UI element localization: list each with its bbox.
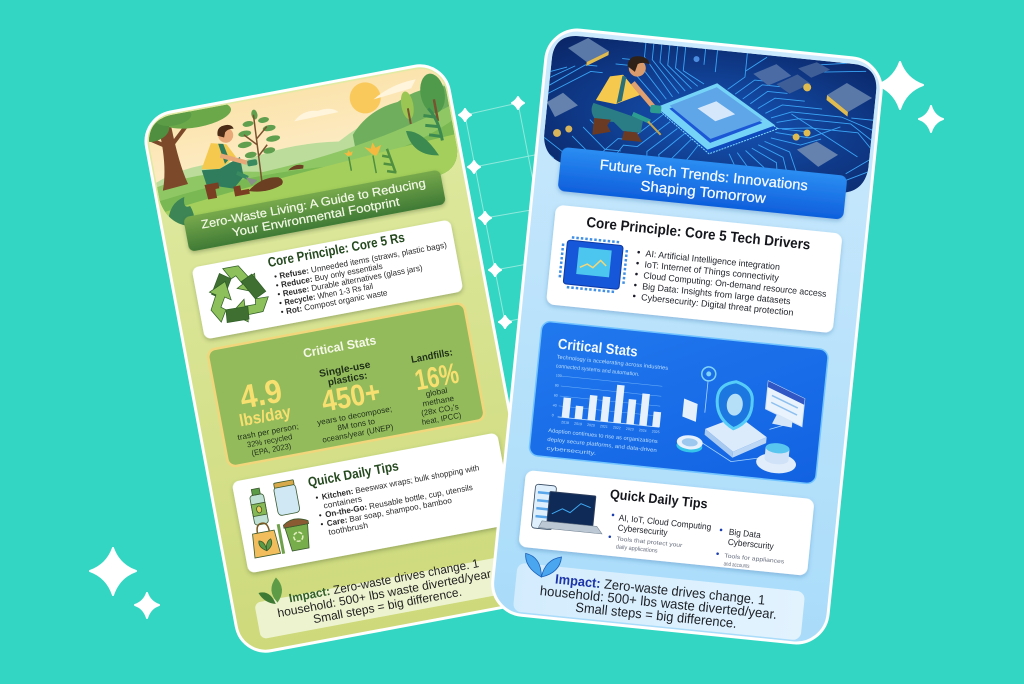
text: impact statement: Small steps = big difference.: [312, 585, 463, 626]
list: tips: Kitchen: Beeswax wraps; bulk shopping with: [321, 463, 480, 502]
text: core principle heading: Core Principle: Core 5 Rs: [266, 230, 406, 270]
panel: critical stats: [207, 302, 485, 467]
stat: 450+ single-use plastics: 450+: [319, 375, 383, 419]
list: five Rs: Reuse: Durable alternatives (glass jars): [282, 262, 424, 298]
bar chart: 0: [552, 413, 554, 417]
text: core principle heading: Core Principle: Core 5 Tech Drivers: [586, 215, 811, 253]
panel: core principle: [192, 219, 463, 340]
list: tech drivers: Cloud Computing: On-demand resource access: [643, 270, 827, 299]
text: stats note: [546, 428, 658, 463]
list: five Rs: Refuse: Unneeded items (straws, plastic bags): [279, 239, 448, 281]
list: tips right column: Tools for appliances: [724, 553, 784, 565]
icons: zero-waste items: [242, 478, 313, 559]
list: tips: Care: Bar soap, shampoo, bamboo: [326, 496, 453, 528]
bar chart: 100: [556, 373, 562, 378]
list: tips: On-the-Go: Reusable bottle, cup, utensils: [324, 483, 474, 519]
text: stats note: cybersecurity.: [546, 446, 597, 457]
bar chart: 2023: [626, 427, 634, 432]
stat: 450+ single-use plastics: years to decompose;: [316, 404, 393, 427]
list: five Rs: Rot: Compost organic waste: [285, 287, 389, 316]
bar chart: 80: [555, 383, 559, 388]
panel: quick daily tips: [518, 470, 815, 576]
text: tips heading: Quick Daily Tips: [307, 458, 400, 490]
bar chart: 2018: [561, 420, 569, 425]
list: tips: [315, 463, 487, 538]
text: impact statement: household: 500+ lbs waste diverted/year: [276, 567, 492, 620]
bar chart: 40: [553, 403, 557, 408]
stat: 4.9 lbs/day: trash per person;: [237, 422, 299, 442]
stat: 4.9 lbs/day: 4.9: [237, 372, 285, 416]
list: tech drivers: Big Data: Insights from large datasets: [642, 281, 792, 306]
stat: 4.9 lbs/day: 32% recycled: [246, 432, 293, 450]
title banner: Your Environmental Footprint: [231, 194, 401, 240]
icon: phone and laptop: [531, 484, 606, 535]
list: tips right column: Big Data: [728, 527, 761, 540]
text: impact statement: Impact: Zero-waste drives change. 1: [554, 571, 766, 608]
stat: 16% landfills: (28x CO₂'s: [420, 402, 459, 418]
text: impact statement: [274, 554, 494, 633]
panel: critical stats: [529, 321, 829, 484]
stat: 16% landfills: Landfills:: [410, 347, 454, 366]
panel: future tech card: [490, 27, 887, 646]
list: tips left column: [607, 512, 712, 560]
text: tips heading: Quick Daily Tips: [609, 487, 708, 511]
technician: [592, 56, 662, 142]
panel: quick daily tips: [232, 432, 514, 573]
stat: 16% landfills: heat, IPCC): [421, 411, 462, 427]
list: tips left column: daily applications: [615, 544, 658, 555]
connector grid between cards: [465, 103, 560, 322]
bar chart: 2024: [639, 428, 647, 433]
bar chart: 2021: [600, 424, 608, 429]
text: stats intro: Technology is accelerating across industries: [556, 354, 669, 372]
list: five Rs: [274, 239, 454, 317]
bar chart: 2022: [613, 426, 621, 430]
icon: recycling arrows: [197, 260, 282, 338]
icon: leaves: [523, 553, 562, 579]
stat: 450+ single-use plastics: Single-use: [318, 360, 372, 380]
stat: 450+ single-use plastics: [308, 357, 396, 445]
heading: critical stats: Critical Stats: [557, 337, 638, 361]
heading: critical stats: Critical Stats: [302, 333, 377, 361]
list: tech drivers: IoT: Internet of Things connectivity: [644, 259, 780, 283]
illustration: gardener planting a sapling: [149, 69, 458, 226]
text: stats intro: connected systems and automation.: [555, 363, 640, 378]
stat: 450+ single-use plastics: 8M tons to: [337, 417, 376, 433]
stat: 16% landfills: [409, 347, 467, 427]
text: impact statement: Impact: Zero-waste drives change. 1: [288, 556, 480, 605]
sparkles: [90, 62, 943, 618]
title banner: [183, 169, 446, 252]
list: tips left column: Cybersecurity: [617, 523, 669, 538]
bar chart: 2019: [574, 422, 582, 426]
list: tips left column: AI, IoT, Cloud Computing: [618, 513, 712, 532]
title banner: Zero-Waste Living: A Guide to Reducing: [200, 176, 427, 232]
list: tips right column: [715, 526, 787, 573]
icon: leaves: [256, 577, 284, 607]
stat: 16% landfills: 16%: [412, 358, 462, 397]
panel: impact: [250, 533, 526, 639]
text: impact statement: [538, 570, 779, 635]
stat: 4.9 lbs/day: [227, 370, 303, 460]
panel: core principle: [546, 205, 843, 333]
list: tech drivers: Cybersecurity: Digital threat protection: [641, 292, 794, 318]
panel: impact: [513, 553, 806, 641]
text: impact statement: Small steps = big difference.: [575, 600, 737, 631]
text: stats intro: [555, 354, 669, 381]
bar chart: 60: [554, 393, 558, 398]
list: five Rs: Recycle: When 1-3 Rs fail: [284, 281, 374, 307]
bar chart: [551, 373, 664, 434]
bar chart: 2020: [587, 423, 595, 428]
list: tips: toothbrush: [328, 521, 369, 537]
panel: zero-waste card: [144, 64, 510, 653]
list: tech drivers: AI: Artificial Intelligence integration: [645, 248, 780, 272]
stat: 16% landfills: global: [425, 386, 448, 399]
icon: cpu chip: [559, 237, 628, 293]
bar chart: 2025: [652, 429, 660, 434]
title banner: Future Tech Trends: Innovations: [599, 157, 809, 194]
illustration: technician and circuit board: [544, 36, 876, 192]
text: stats note: deploy secure platforms, and data-driven: [547, 437, 657, 454]
list: tips right column: Cyberscurity: [727, 537, 775, 551]
illustration: cloud security network: [675, 364, 807, 475]
text: impact statement: household: 500+ lbs waste diverted/year.: [539, 583, 778, 622]
chip: [660, 83, 779, 154]
title banner: Shaping Tomorrow: [640, 179, 767, 207]
list: tips right column: and accounts: [723, 561, 750, 570]
list: tips left column: Tools that protect your: [616, 536, 683, 549]
list: tech drivers: [632, 248, 830, 321]
stat: 4.9 lbs/day: lbs/day: [238, 402, 293, 430]
title banner: [558, 147, 847, 220]
text: stats note: Adoption continues to rise as organizations: [548, 428, 658, 445]
stat: 450+ single-use plastics: plastics:: [327, 370, 368, 389]
list: tips: containers: [323, 494, 363, 510]
list: five Rs: Reduce: Buy only essentials: [280, 261, 383, 289]
stat: 16% landfills: methane: [422, 394, 455, 409]
stat: 4.9 lbs/day: (EPA, 2023): [251, 442, 292, 458]
stat: 450+ single-use plastics: oceans/year (UNEP): [322, 422, 394, 445]
